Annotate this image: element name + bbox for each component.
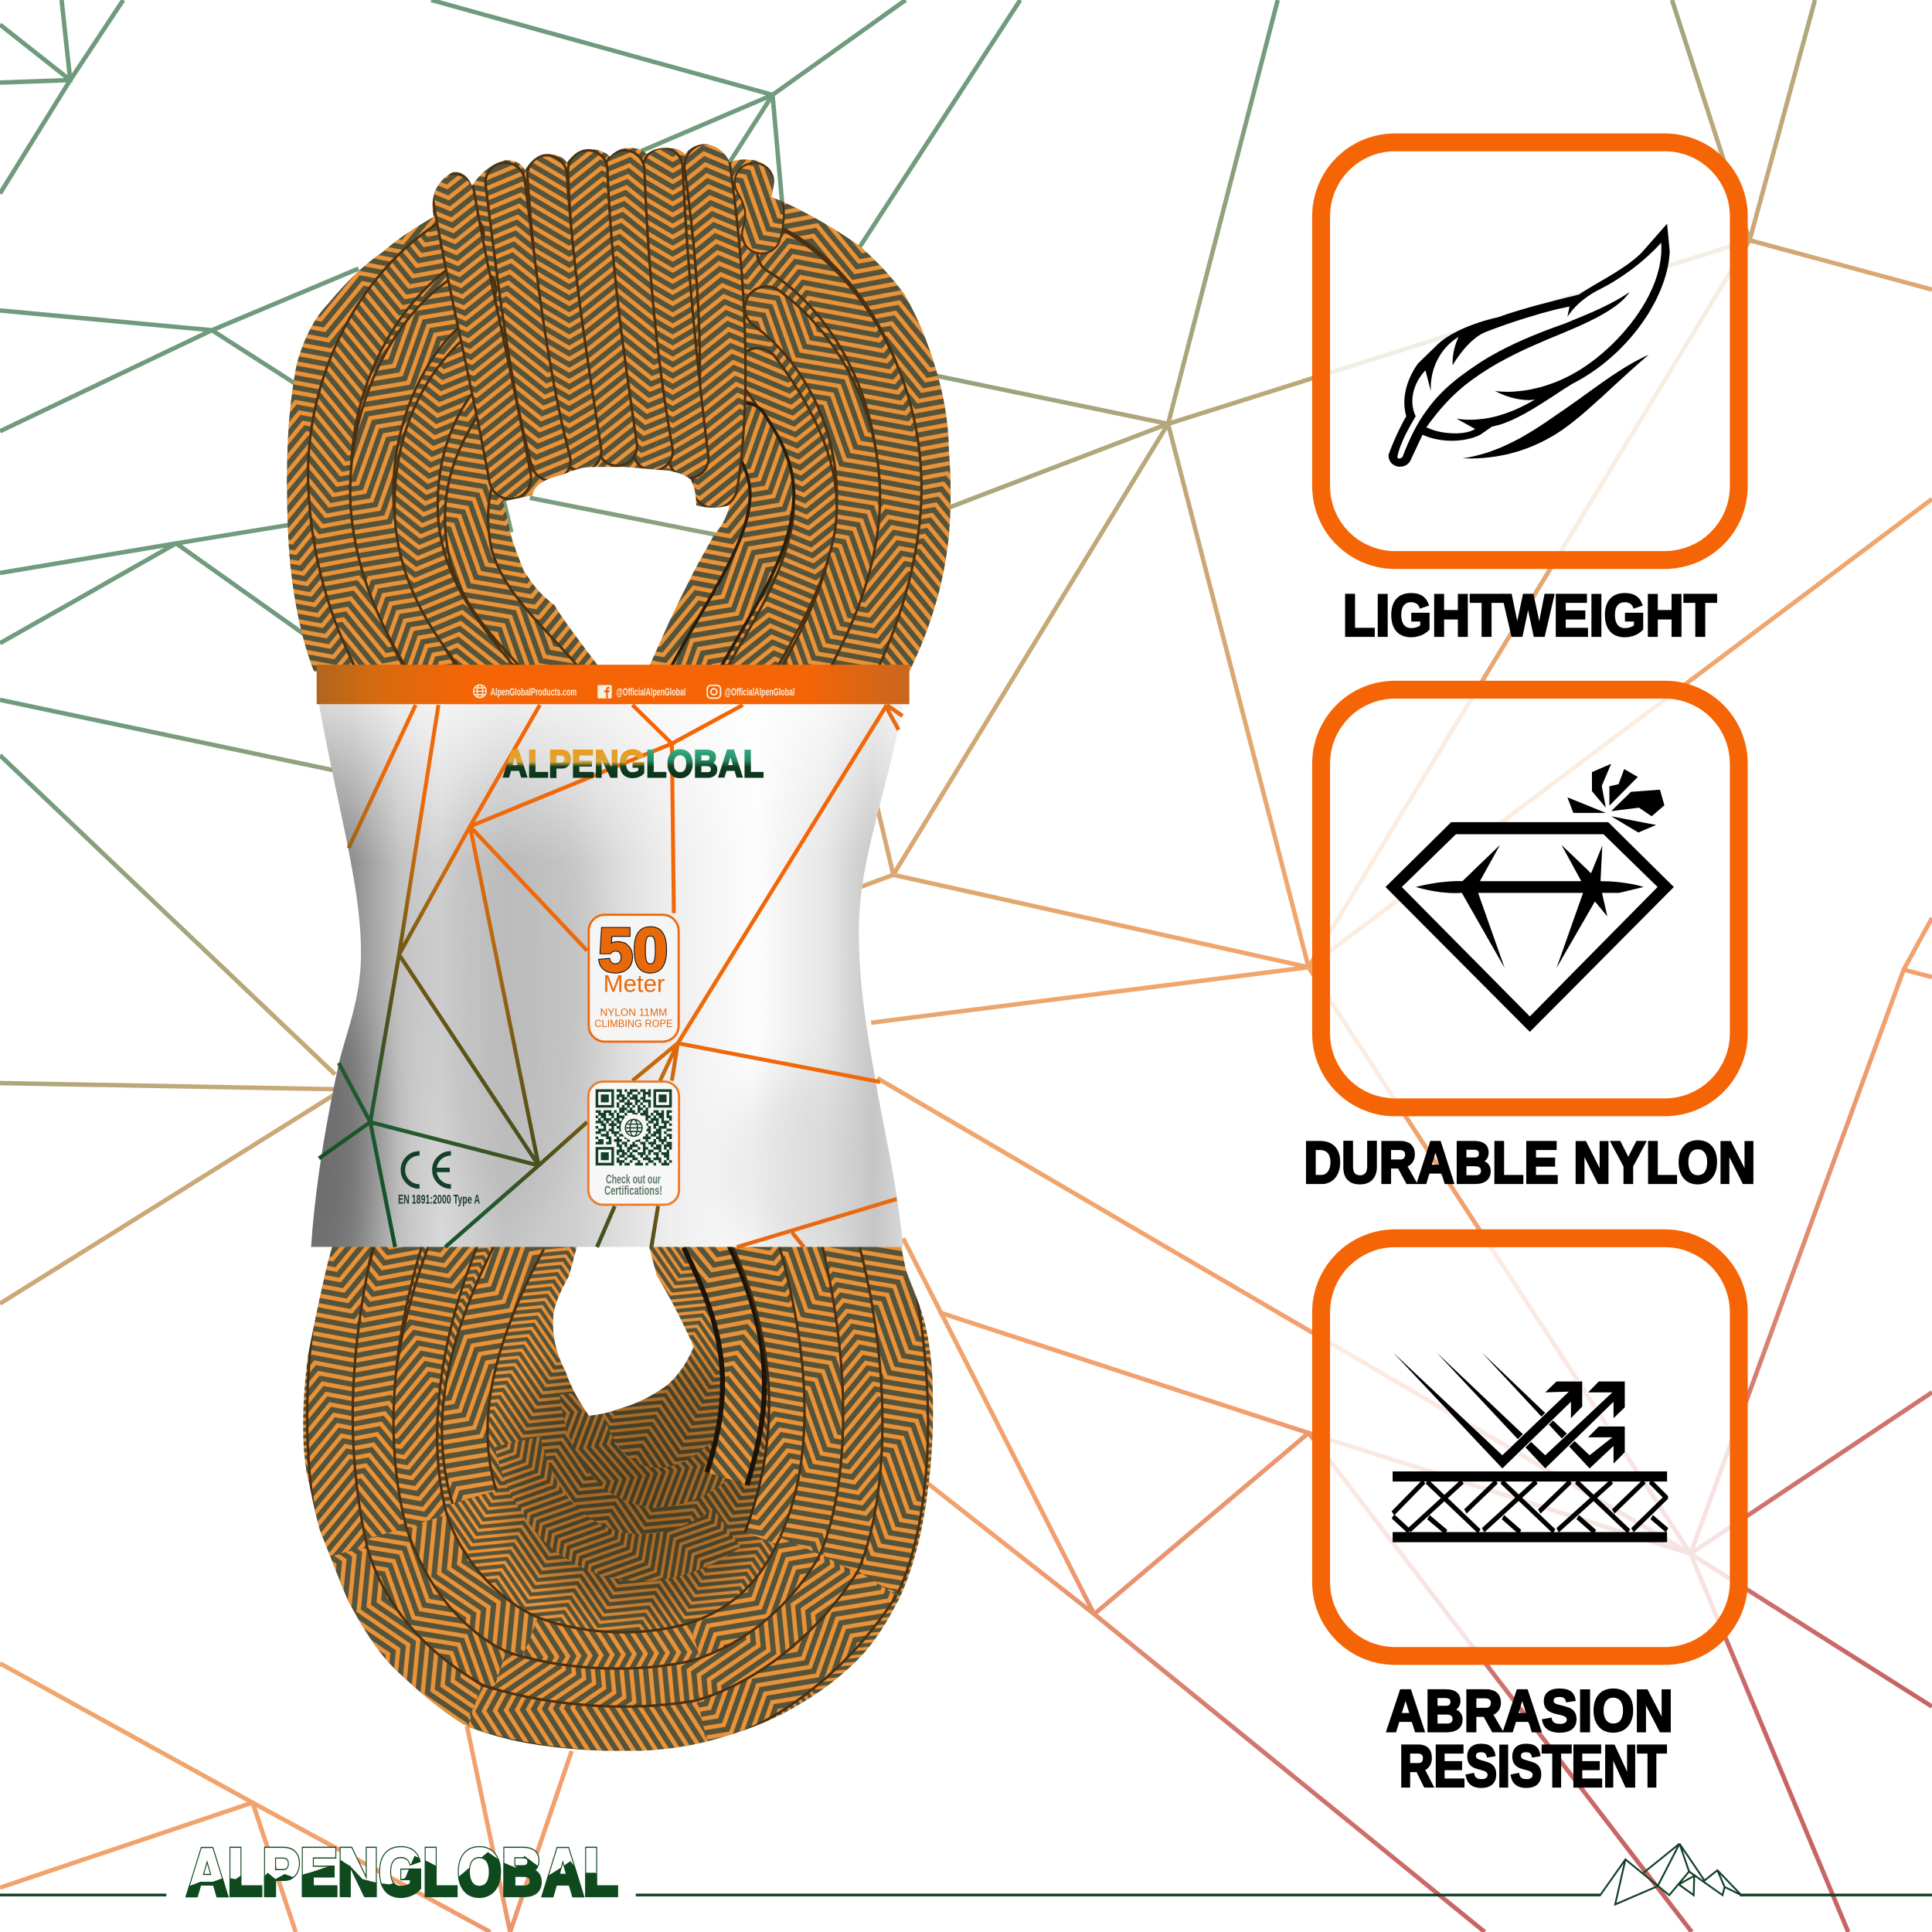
icon: QR centre globe xyxy=(621,1114,647,1141)
feature panel: durable nylon xyxy=(1304,689,1756,1196)
icon: feather xyxy=(1389,223,1670,467)
icon: cracked diamond xyxy=(1386,764,1674,1032)
band logo: ALPENGLOBAL xyxy=(503,742,764,785)
band: social handles xyxy=(474,685,794,699)
band: social handles: AlpenGlobalProducts.com xyxy=(491,686,577,698)
label: ABRASION xyxy=(1386,1679,1673,1744)
feature panel: lightweight xyxy=(1321,142,1739,648)
length badge: 50 meter: Meter xyxy=(604,969,665,997)
icon: instagram xyxy=(707,685,720,698)
length badge: 50 meter: NYLON 11MM xyxy=(600,1006,667,1018)
band: social handles: @OfficialAlpenGlobal xyxy=(616,686,685,698)
CE mark and standard: EN 1891:2000 Type A xyxy=(398,1192,480,1207)
QR certification badge xyxy=(588,1082,679,1205)
icon: facebook xyxy=(597,685,612,699)
footer logo: ALPENGLOBAL xyxy=(187,1835,618,1910)
panel frame xyxy=(1321,1238,1739,1656)
packaging band xyxy=(298,665,912,1281)
icon: CE mark xyxy=(403,1153,451,1186)
label: DURABLE NYLON xyxy=(1304,1130,1756,1196)
icon: deflected abrasion on fabric xyxy=(1393,1352,1667,1543)
length badge: 50 meter xyxy=(589,915,679,1042)
QR certification badge: Check out our xyxy=(606,1173,661,1187)
rope coil: upper half xyxy=(277,135,961,690)
band: geometric lines xyxy=(319,705,903,1247)
length badge: 50 meter: CLIMBING ROPE xyxy=(594,1018,673,1029)
footer rule xyxy=(0,1894,1932,1896)
label: RESISTENT xyxy=(1399,1734,1666,1800)
band: orange social strip xyxy=(317,665,910,704)
label xyxy=(1386,1679,1673,1800)
icon: globe xyxy=(474,685,486,698)
label: LIGHTWEIGHT xyxy=(1342,583,1716,648)
footer logo: ALPENGLOBAL xyxy=(187,1835,618,1910)
band: silver wrapper xyxy=(311,704,903,1247)
panel frame xyxy=(1321,142,1739,560)
footer mountain icon xyxy=(1600,1844,1741,1904)
CE mark and standard xyxy=(398,1153,480,1207)
band: social handles: @OfficialAlpenGlobal xyxy=(725,686,794,698)
rope coil: lower half xyxy=(296,1232,943,1762)
feature panel: abrasion resistant xyxy=(1321,1238,1739,1800)
panel frame xyxy=(1321,689,1739,1107)
QR code xyxy=(596,1089,672,1165)
length badge: 50 meter: 50 xyxy=(598,915,668,984)
length badge: 50 meter: 50 xyxy=(598,915,668,984)
QR certification badge: Certifications! xyxy=(604,1184,662,1198)
footer logo: ALPENGLOBAL xyxy=(187,1835,618,1910)
footer logo xyxy=(185,1845,618,1898)
